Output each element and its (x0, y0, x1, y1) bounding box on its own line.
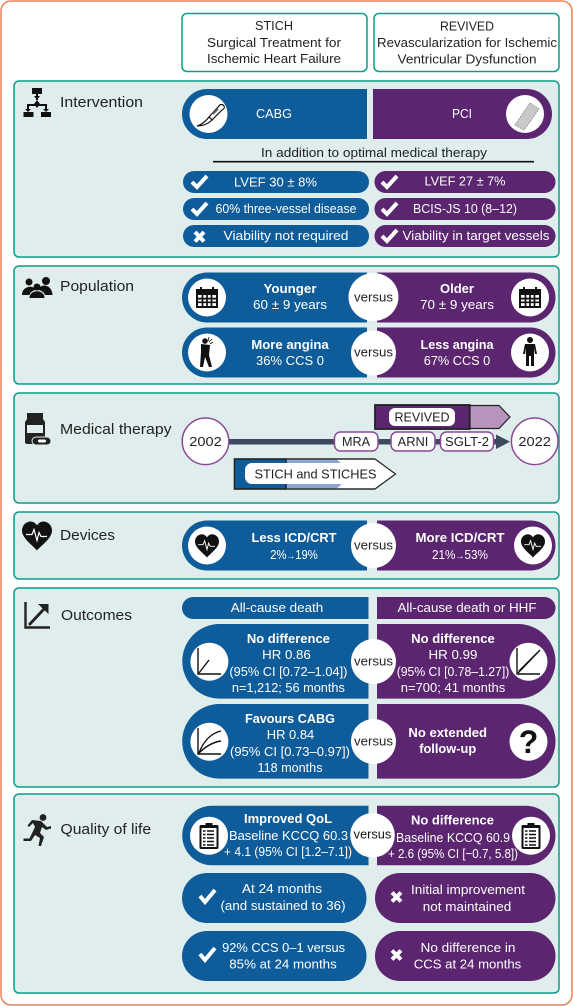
banner: all-cause death or HHF (377, 597, 556, 619)
row: primary outcome: HR 0.86 (262, 647, 311, 662)
timeline arrow (228, 434, 510, 449)
finding: at 24 months: At 24 months (242, 881, 323, 896)
arrow: REVIVED enrolment: REVIVED (394, 410, 450, 424)
heading: population: Population (60, 278, 134, 295)
finding: CCS no difference (375, 931, 556, 981)
icon: scalpel (197, 104, 224, 126)
icon: standing person (523, 337, 537, 366)
icon: stent (515, 103, 539, 130)
header: STICH: Surgical Treatment for (207, 35, 342, 50)
row: ICD/CRT (182, 520, 556, 570)
tag: ARNI: ARNI (398, 434, 428, 449)
finding: CCS no difference: No difference in (420, 940, 516, 955)
icon: rising chart (26, 602, 50, 628)
row: KCCQ: + 4.1 (95% CI [1.2–7.1]) (224, 844, 352, 859)
text: optimal medical therapy: In addition to optimal medical therapy (261, 145, 488, 160)
icon: heart with ECG (22, 522, 52, 550)
row: primary outcome (182, 624, 555, 699)
banner: all-cause death (182, 597, 368, 619)
tag: MRA (334, 432, 378, 451)
finding: CCS improved (182, 931, 366, 981)
pill: CABG (182, 89, 367, 139)
arrow: STICH and STICHES enrolment (234, 459, 396, 489)
header: STICH: Ischemic Heart Failure (207, 51, 341, 66)
header: STICH (182, 14, 367, 72)
criterion: viability not required: Viability not required (224, 228, 348, 243)
arrow: STICH and STICHES enrolment: STICH and STICHES (254, 466, 377, 482)
finding: at 24 months: (and sustained to 36) (220, 898, 346, 913)
tag: MRA: MRA (342, 434, 370, 449)
criterion: three-vessel disease (183, 198, 369, 220)
criterion: viability in target vessels: Viability in target vessels (402, 228, 550, 243)
row: primary outcome: (95% CI [0.78–1.27]) (397, 664, 509, 679)
finding: CCS improved: 85% at 24 months (229, 956, 337, 972)
row: KCCQ: + 2.6 (95% CI [−0.7, 5.8]) (388, 846, 518, 861)
row: ICD/CRT: Less ICD/CRT (252, 530, 337, 545)
row: extended follow-up: HR 0.84 (267, 727, 314, 742)
tag: SGLT-2: SGLT-2 (445, 434, 489, 449)
pill: PCI (373, 89, 552, 139)
panel: population (14, 266, 559, 384)
row: KCCQ: No difference (411, 812, 494, 828)
panel: outcomes (14, 588, 559, 787)
header: REVIVED: Revascularization for Ischemic (377, 35, 558, 50)
row: angina: More angina (251, 337, 330, 352)
row: extended follow-up: No extended (408, 725, 487, 740)
row: extended follow-up (182, 704, 555, 779)
finding: initial improvement: not maintained (423, 899, 511, 914)
criterion: LVEF 30: LVEF 30 ± 8% (234, 174, 317, 190)
icon: chart no difference left (198, 648, 221, 674)
icon: people (22, 277, 52, 298)
panel: devices (14, 512, 559, 579)
row: angina (182, 328, 556, 378)
finding: CCS no difference: CCS at 24 months (414, 956, 522, 972)
row: primary outcome: versus (354, 654, 394, 668)
tag: ARNI (391, 432, 435, 451)
criterion: LVEF 30 (183, 171, 369, 193)
icon: chart no difference right (517, 648, 540, 674)
panel: quality of life (14, 794, 559, 993)
criterion: BCIS-JS: BCIS-JS 10 (8–12) (413, 201, 517, 216)
finding: initial improvement: Initial improvement (411, 882, 525, 897)
header: STICH: STICH (255, 18, 293, 33)
tag: SGLT-2 (440, 432, 494, 451)
panel: medical therapy (14, 393, 559, 503)
banner: all-cause death or HHF: All-cause death or HHF (398, 600, 537, 615)
icon: runner (24, 814, 51, 846)
criterion: LVEF 27: LVEF 27 ± 7% (424, 174, 506, 188)
heading: intervention: Intervention (60, 94, 143, 111)
banner: all-cause death: All-cause death (231, 600, 323, 615)
criterion: three-vessel disease: 60% three-vessel disease (216, 201, 356, 216)
row: age: versus (354, 290, 394, 304)
row: extended follow-up: 118 months (258, 760, 323, 775)
row: age: 70 ± 9 years (420, 297, 495, 312)
row: age: Younger (264, 281, 316, 296)
heading: devices: Devices (60, 527, 115, 544)
heading: quality of life: Quality of life (60, 821, 151, 838)
year: 2022 (511, 418, 558, 465)
criterion: viability in target vessels (374, 225, 556, 247)
row: ICD/CRT: More ICD/CRT (416, 530, 505, 545)
finding: at 24 months (182, 873, 366, 923)
year: 2022: 2022 (518, 434, 551, 449)
criterion: BCIS-JS (374, 198, 556, 220)
icon: chart diverging curves (198, 728, 221, 754)
header: REVIVED: Ventricular Dysfunction (398, 52, 536, 66)
finding: CCS improved: 92% CCS 0–1 versus (222, 940, 346, 955)
row: extended follow-up: Favours CABG (245, 711, 335, 726)
row: ICD/CRT: 21%→53% (432, 547, 488, 562)
row: angina: 36% CCS 0 (256, 353, 324, 368)
row: KCCQ: Baseline KCCQ 60.3 (229, 828, 348, 843)
row: age: 60 ± 9 years (253, 297, 328, 312)
arrow: REVIVED enrolment (375, 405, 510, 429)
icon: question mark: ? (519, 724, 538, 760)
icon: person with chest pain (200, 337, 213, 367)
header: REVIVED (374, 14, 559, 72)
row: extended follow-up: versus (354, 734, 394, 748)
row: angina: 67% CCS 0 (424, 353, 490, 368)
row: KCCQ (182, 806, 555, 865)
row: KCCQ: versus (354, 828, 391, 842)
row: primary outcome: n=1,212; 56 months (232, 680, 345, 695)
header: REVIVED: REVIVED (440, 18, 494, 34)
year: 2002 (182, 418, 229, 465)
row: age: Older (440, 281, 474, 296)
row: KCCQ: Baseline KCCQ 60.9 (396, 830, 510, 845)
icon: pill bottle (25, 413, 51, 445)
row: primary outcome: HR 0.99 (428, 647, 478, 662)
row: ICD/CRT: 2%→19% (270, 547, 318, 562)
row: ICD/CRT: versus (354, 538, 394, 552)
row: primary outcome: No difference (411, 631, 495, 646)
row: primary outcome: No difference (247, 631, 330, 646)
finding: initial improvement (375, 873, 556, 923)
row: extended follow-up: follow-up (419, 741, 476, 756)
pill: PCI: PCI (452, 106, 472, 121)
pill: CABG: CABG (256, 106, 292, 121)
criterion: viability not required (183, 225, 369, 247)
row: angina: versus (354, 344, 394, 360)
row: age (182, 272, 556, 322)
panel: intervention (14, 81, 559, 257)
row: extended follow-up: (95% CI [0.73–0.97]) (230, 744, 350, 759)
year: 2002: 2002 (189, 434, 222, 449)
criterion: LVEF 27 (374, 171, 556, 193)
row: primary outcome: n=700; 41 months (401, 680, 506, 695)
row: primary outcome: (95% CI [0.72–1.04]) (229, 664, 347, 679)
row: angina: Less angina (420, 337, 494, 352)
heading: outcomes: Outcomes (61, 607, 132, 624)
row: KCCQ: Improved QoL (244, 811, 332, 826)
icon: flowchart (24, 88, 51, 117)
heading: medical therapy: Medical therapy (60, 421, 172, 438)
